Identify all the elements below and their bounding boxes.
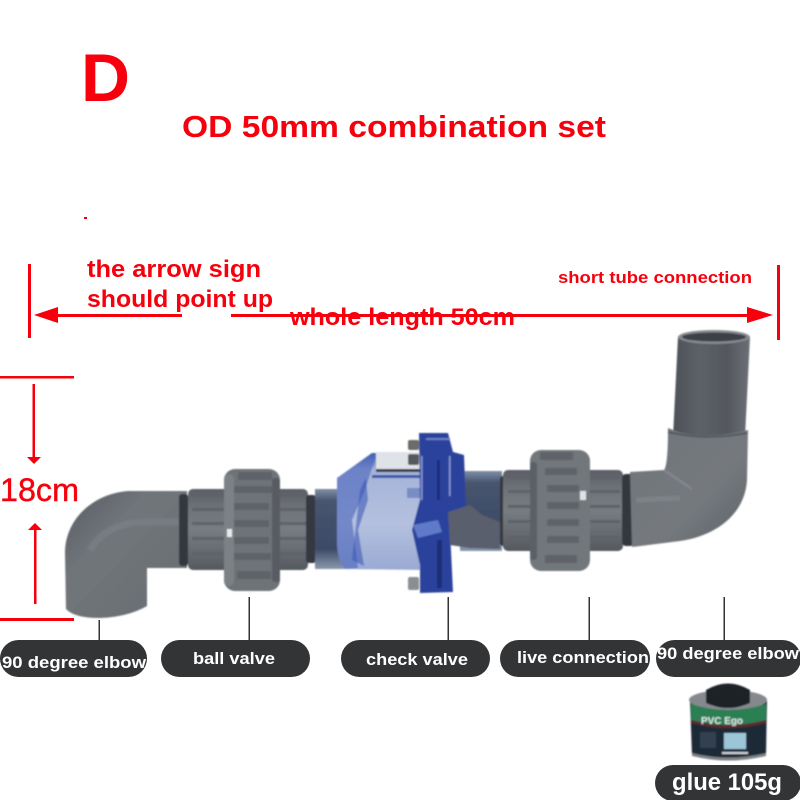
label pill: glue 105g: [655, 765, 800, 800]
left 90 degree elbow: [65, 491, 187, 618]
height dimension arrows: [0, 376, 74, 621]
label pill: live connection: live connection: [517, 648, 649, 667]
icon: glue can: [689, 684, 767, 760]
label pill: ball valve: ball valve: [193, 649, 275, 668]
label pill: 90 degree elbow right: [656, 640, 800, 677]
label pill: 90 degree elbow left: [0, 640, 147, 677]
small red speck: [84, 217, 87, 219]
label pill: 90 degree elbow left: 90 degree elbow: [2, 653, 147, 672]
label pill: check valve: check valve: [366, 650, 468, 669]
pipe assembly photo: [65, 330, 750, 618]
left ball valve union: [188, 469, 308, 591]
right collar: [622, 474, 634, 546]
whole length dimension arrow: [28, 264, 780, 340]
title letter D: D: [81, 40, 130, 116]
label: short tube connection: short tube connection: [558, 268, 752, 287]
note: arrow sign direction: the arrow sign: [87, 256, 261, 283]
label: whole length 50cm: whole length 50cm: [289, 304, 515, 331]
label pill: live connection: [500, 640, 650, 677]
label pill: ball valve: [161, 640, 310, 677]
note: arrow sign direction: [87, 256, 273, 313]
label: 18cm: 18cm: [0, 472, 79, 508]
note: arrow sign direction: should point up: [87, 286, 273, 313]
left collar: [179, 494, 188, 566]
label pill: glue 105g: glue 105g: [672, 769, 782, 796]
leader lines: [98, 597, 725, 640]
label pill: 90 degree elbow right: 90 degree elbow: [657, 644, 800, 663]
icon: glue can: PVC Ego: [701, 716, 743, 727]
right 90 degree elbow: [630, 428, 748, 547]
label pill: check valve: [341, 640, 490, 677]
check valve: [306, 433, 502, 593]
title: OD 50mm combination set: OD 50mm combination set: [182, 109, 606, 144]
right short tube: [673, 330, 750, 437]
right live connection union: [500, 450, 623, 571]
